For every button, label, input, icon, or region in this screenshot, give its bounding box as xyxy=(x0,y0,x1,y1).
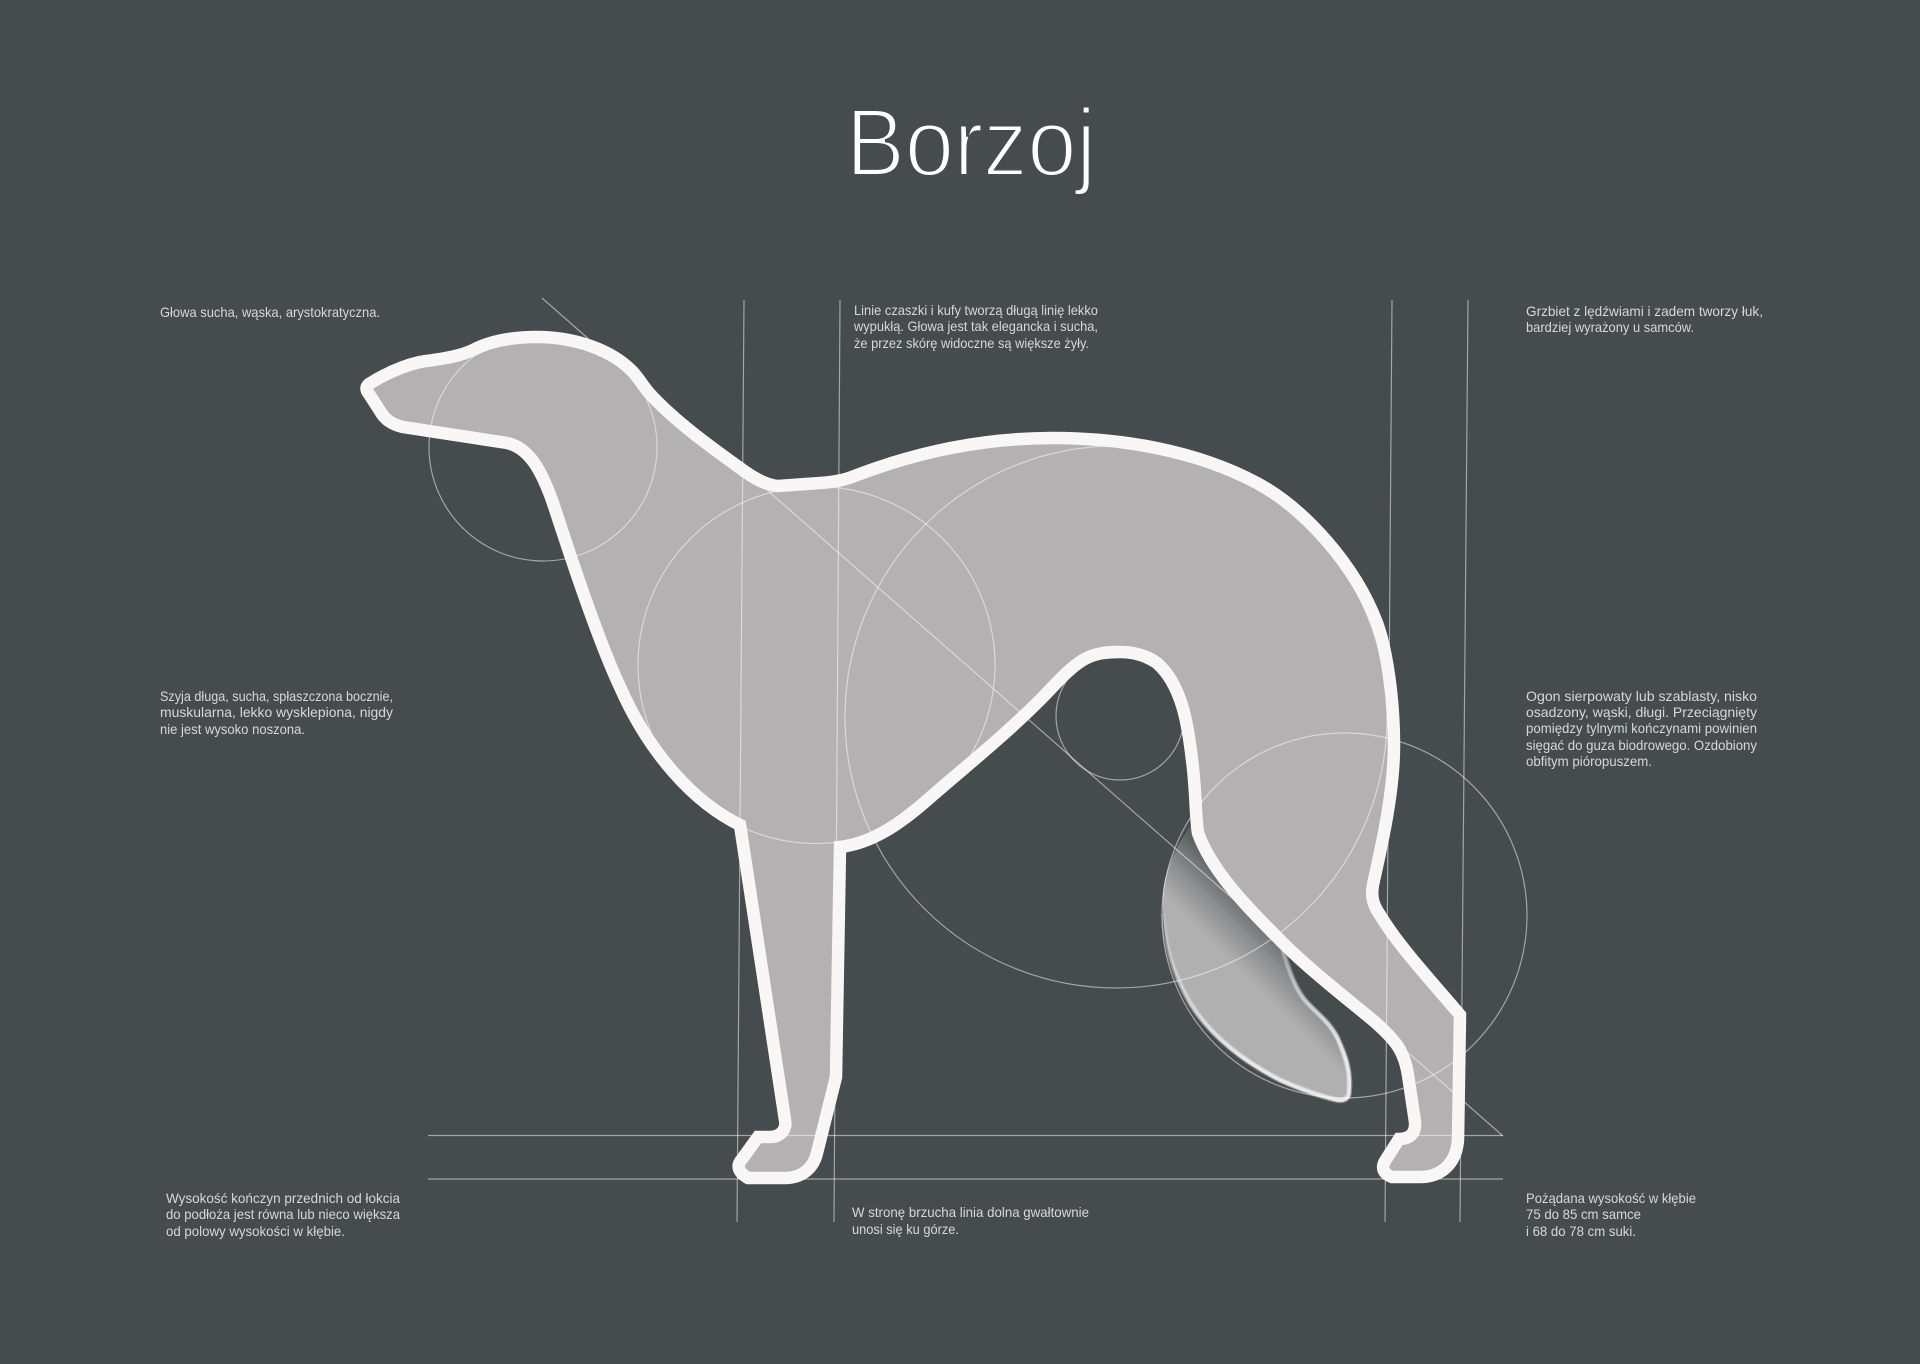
text: neck: nie jest wysoko noszona. xyxy=(160,721,305,737)
text: belly line: W stronę brzucha linia dolna gwałtownie xyxy=(852,1204,1089,1220)
text: belly line xyxy=(852,1204,1089,1237)
text: forelimb height xyxy=(166,1190,400,1239)
text: tail xyxy=(1526,688,1757,769)
text: skull and muzzle lines: Linie czaszki i kufy tworzą długą linię lekko xyxy=(854,302,1098,318)
text: back: Grzbiet z lędźwiami i zadem tworzy łuk, xyxy=(1526,303,1763,319)
dog outline xyxy=(366,337,1460,1178)
text: neck xyxy=(160,688,393,737)
text: forelimb height: do podłoża jest równa lub nieco większa xyxy=(166,1206,400,1222)
tail xyxy=(1163,823,1349,1100)
text: tail: pomiędzy tylnymi kończynami powinien xyxy=(1526,720,1757,736)
text: tail: sięgać do guza biodrowego. Ozdobiony xyxy=(1526,737,1757,753)
text: skull and muzzle lines: że przez skórę widoczne są większe żyły. xyxy=(854,335,1089,351)
text: skull and muzzle lines: wypukłą. Głowa jest tak elegancka i sucha, xyxy=(853,318,1098,334)
text: desired height: i 68 do 78 cm suki. xyxy=(1526,1223,1636,1239)
text: neck: muskularna, lekko wysklepiona, nigdy xyxy=(160,704,393,720)
text: tail: obfitym pióropuszem. xyxy=(1526,753,1652,769)
text: tail: Ogon sierpowaty lub szablasty, nisko xyxy=(1526,688,1757,704)
text: back: bardziej wyrażony u samców. xyxy=(1526,319,1694,335)
text: head: Głowa sucha, wąska, arystokratyczna. xyxy=(160,304,380,320)
dog silhouette xyxy=(366,337,1460,1178)
text: desired height: Pożądana wysokość w kłębie xyxy=(1526,1190,1696,1206)
text: desired height xyxy=(1526,1190,1696,1239)
construction lines xyxy=(428,298,1527,1222)
title: Borzoj xyxy=(846,90,1096,196)
text: back xyxy=(1526,303,1763,335)
text: forelimb height: Wysokość kończyn przednich od łokcia xyxy=(166,1190,400,1206)
text: belly line: unosi się ku górze. xyxy=(852,1221,959,1237)
text: forelimb height: od polowy wysokości w kłębie. xyxy=(166,1223,345,1239)
text: neck: Szyja długa, sucha, spłaszczona bocznie, xyxy=(160,688,393,704)
text: tail: osadzony, wąski, długi. Przeciągnięty xyxy=(1526,704,1757,720)
text: desired height: 75 do 85 cm samce xyxy=(1526,1206,1641,1222)
text: skull and muzzle lines xyxy=(853,302,1098,351)
